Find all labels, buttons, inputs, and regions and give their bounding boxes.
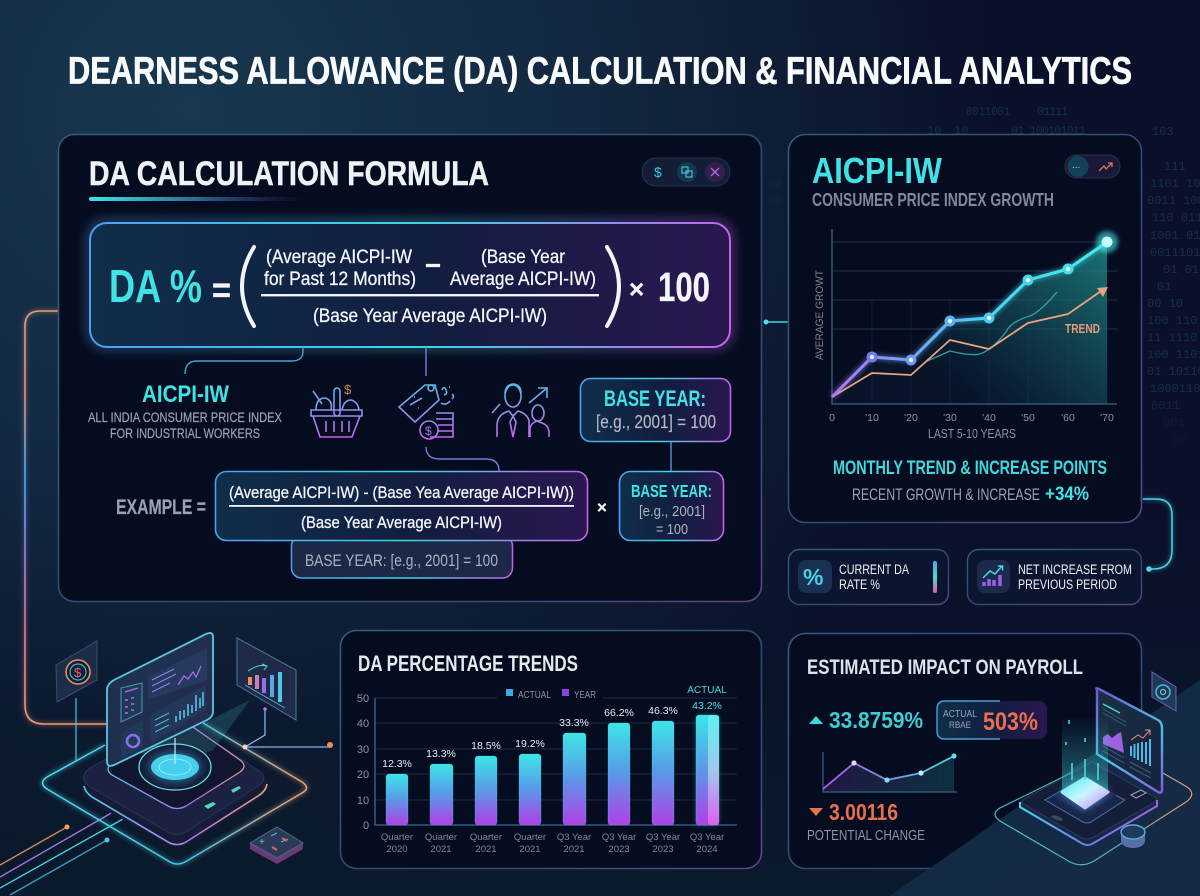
x axis tick labels: '20 [904,412,918,424]
teal secondary line [925,292,1057,362]
category labels: 2021 [563,844,585,855]
binary data pattern: 00 [767,177,781,191]
y axis labels: 30 [357,744,369,756]
denominator: (Base Year Average AICPI-IW) [313,306,547,327]
icon: shopping basket [311,382,362,437]
legend [506,689,596,701]
toggle icons [1065,155,1120,178]
actual rate box [937,701,1047,739]
glowing ring dial [139,738,211,790]
value labels: 66.2% [604,707,634,719]
example formula box [216,472,588,540]
example formula box: (Average AICPI-IW) - (Base Yea Average AICPI-IW)) [229,483,574,502]
floating icon [1152,672,1176,711]
y axis labels: 0 [363,820,369,832]
actual rate box: 503% [983,708,1038,736]
icon pill: dollar, share, close: $ [654,164,662,180]
base year strip under example [292,536,512,578]
screen light beam [133,700,250,767]
net increase label [1018,562,1132,592]
binary data pattern: 01 01 [1163,263,1199,277]
calculator: + [259,837,265,848]
formula box: = [212,269,231,310]
data sparks [1066,720,1098,780]
panel: DA calculation formula [58,134,762,602]
base year multiplier box: = 100 [656,522,688,538]
subheading: CONSUMER PRICE INDEX GROWTH [812,190,1054,210]
fraction bar [261,294,599,296]
category labels: 2021 [430,844,452,855]
floating coin card [56,641,97,760]
times 100: × [629,274,644,304]
DA percent label: DA % [109,260,202,312]
actual rate box: ACTUAL [943,709,977,720]
connector to bar panel [242,707,333,750]
trend label: TREND [1065,322,1100,336]
x axis tick labels [829,412,1114,424]
panel: AICPI-IW consumer price index growth [788,134,1142,522]
binary data pattern [767,105,1200,447]
y axis labels: 50 [357,693,369,705]
bars [386,715,719,825]
AICPI-IW definition: ALL INDIA CONSUMER PRICE INDEX [88,410,282,425]
x axis tick labels: '50 [1021,412,1035,424]
data lines [0,812,123,895]
heading underline [89,197,305,201]
base year strip under example: BASE YEAR: [e.g., 2001] = 100 [305,551,498,570]
icon: rising bars [977,560,1010,593]
glowing chip [1062,778,1108,808]
binary data pattern: 1000110 [1150,382,1200,396]
trend line [832,289,1104,397]
AICPI-IW definition: AICPI-IW [142,381,229,408]
negative stat: 3.00116 [829,799,898,825]
growth line [832,242,1107,397]
category labels: Q3 Year [690,832,724,843]
icon: price tag and coins: $ [425,424,432,438]
toggle icons: ... [1072,160,1080,171]
bar chart [357,685,737,855]
floating coin card: $ [74,665,82,680]
binary data pattern: 00 10 [1147,297,1183,311]
category labels: 2021 [475,844,497,855]
formula box [90,223,730,347]
x axis title: LAST 5-10 YEARS [928,427,1016,441]
binary data pattern: 01111 [1037,105,1068,119]
binary data pattern: 11 1110 [1147,331,1197,345]
recent growth line: RECENT GROWTH & INCREASE [852,485,1040,504]
binary data pattern: 00 [767,194,781,208]
y axis label: AVERAGE GROWT [814,270,826,360]
heading: DA percentage trends: DA PERCENTAGE TRENDS [358,651,578,676]
net increase label: PREVIOUS PERIOD [1018,577,1117,592]
mini gauge bar [933,561,937,593]
card: net increase [968,550,1142,604]
connector: AICPI panel to net increase card [1143,499,1172,572]
base year box [580,378,730,442]
potential change label: POTENTIAL CHANGE [807,827,925,844]
tablet screen [1096,688,1162,793]
value labels: 33.3% [559,717,589,729]
recent growth line: +34% [1045,484,1089,505]
numerator: (Base Year [481,247,566,268]
binary data pattern: 100 110 [1147,314,1197,328]
x axis tick labels: '70 [1100,412,1114,424]
icon pill: dollar, share, close [642,158,730,186]
category labels: 2020 [386,844,408,855]
connector: left line from formula to illustration [25,308,108,724]
heading: DA calculation formula: DA CALCULATION FORMULA [89,155,489,193]
value labels: ACTUAL [687,685,727,696]
base year multiplier box: BASE YEAR: [631,481,712,501]
illustration: isometric finance dashboard left [0,633,333,895]
panel: estimated impact on payroll [788,634,1200,896]
negative stat [809,799,898,825]
category labels: 2024 [696,844,718,855]
current DA rate label [839,562,909,592]
value labels: 43.2% [692,700,722,712]
x axis tick labels: '60 [1061,412,1075,424]
category labels: Q3 Year [602,832,636,843]
base year multiplier box: [e.g., 2001] [639,504,705,520]
heading: AICPI-IW: AICPI-IW [812,150,942,191]
value labels: 13.3% [426,748,456,760]
binary data pattern: 10 [954,124,968,138]
numerator: (Average AICPI-IW [266,247,412,268]
monthly trend heading: MONTHLY TREND & INCREASE POINTS [833,458,1107,479]
binary data pattern: 111 [1164,160,1186,174]
y axis labels: 10 [357,795,369,807]
mini line chart [823,752,957,792]
binary data pattern: 10 [927,124,941,138]
base year multiplier box [620,472,724,540]
binary data pattern: 01 100101011 [1011,124,1086,138]
dashboard screen [107,633,213,766]
legend: YEAR [574,690,596,701]
times 100: 100 [658,264,710,310]
illustration: isometric finance device right [995,672,1192,865]
line chart [814,229,1118,441]
panel: DA percentage trends [340,630,762,868]
outer rounded loop [42,723,306,864]
binary data pattern: 0011 [1151,399,1180,413]
base year box: BASE YEAR: [604,386,706,411]
positive stat: 33.8759% [829,707,923,733]
chart area fill [832,242,1107,404]
category labels: Quarter [514,832,546,843]
y axis labels [357,693,369,832]
value labels: 18.5% [471,740,501,752]
y axis labels: 20 [357,769,369,781]
numerator: Average AICPI-IW) [450,269,596,290]
numerator [264,247,596,290]
x axis tick labels: 0 [829,412,835,424]
category labels: Quarter [470,832,502,843]
coin node [1121,825,1145,848]
x axis tick labels: '30 [943,412,957,424]
value labels: 19.2% [515,738,545,750]
category labels: Quarter [381,832,413,843]
multiply sign: × [597,498,607,517]
calculator [250,827,303,864]
binary data pattern: 001 [1163,416,1185,430]
base year box: [e.g., 2001] = 100 [596,412,716,432]
category labels [381,832,724,855]
connector: formula panel to AICPI panel [764,320,788,324]
icon: shopping basket: $ [344,382,352,397]
value labels: 46.3% [648,705,678,717]
category labels: 2021 [519,844,541,855]
category labels: Q3 Year [557,832,591,843]
category labels: Quarter [425,832,457,843]
current DA rate label: RATE % [839,577,880,592]
times 100 [629,264,710,310]
net increase label: NET INCREASE FROM [1018,562,1132,577]
icon: percent: % [803,564,823,590]
binary data pattern: 0011001 [966,105,1010,119]
value labels: 12.3% [382,758,412,770]
hologram beam [1062,717,1108,808]
actual rate box: RBAE [949,720,971,731]
card: current DA rate [788,550,948,604]
category labels: Q3 Year [646,832,680,843]
legend: ACTUAL [518,690,551,701]
orbit loop [995,772,1192,865]
binary data pattern: 10 [1172,433,1186,447]
icon: percent [798,560,832,593]
formula box glow [89,222,731,347]
data points [866,231,1118,366]
layered base [83,721,267,847]
example formula box: (Base Year Average AICPI-IW) [301,513,502,532]
current DA rate label: CURRENT DA [839,562,909,577]
floating chart card [237,638,296,720]
y axis labels: 40 [357,718,369,730]
x axis tick labels: '10 [865,412,879,424]
example label: EXAMPLE = [116,496,206,519]
binary data pattern: 103 [1152,125,1174,139]
base plate [1020,762,1157,845]
icon: workers with arrow [492,384,549,437]
AICPI-IW definition [88,381,282,441]
connector lines [185,347,671,471]
icon: price tag and coins [399,385,454,439]
value labels [382,685,727,770]
category labels: 2023 [652,844,674,855]
heading: estimated impact: ESTIMATED IMPACT ON PAYROLL [807,656,1083,679]
x axis tick labels: '40 [982,412,996,424]
numerator: for Past 12 Months) [264,269,416,290]
AICPI-IW definition: FOR INDUSTRIAL WORKERS [110,426,260,441]
left bracket [242,247,254,326]
right bracket [607,247,619,326]
category labels: 2023 [608,844,630,855]
binary data pattern: 01 [1157,280,1171,294]
